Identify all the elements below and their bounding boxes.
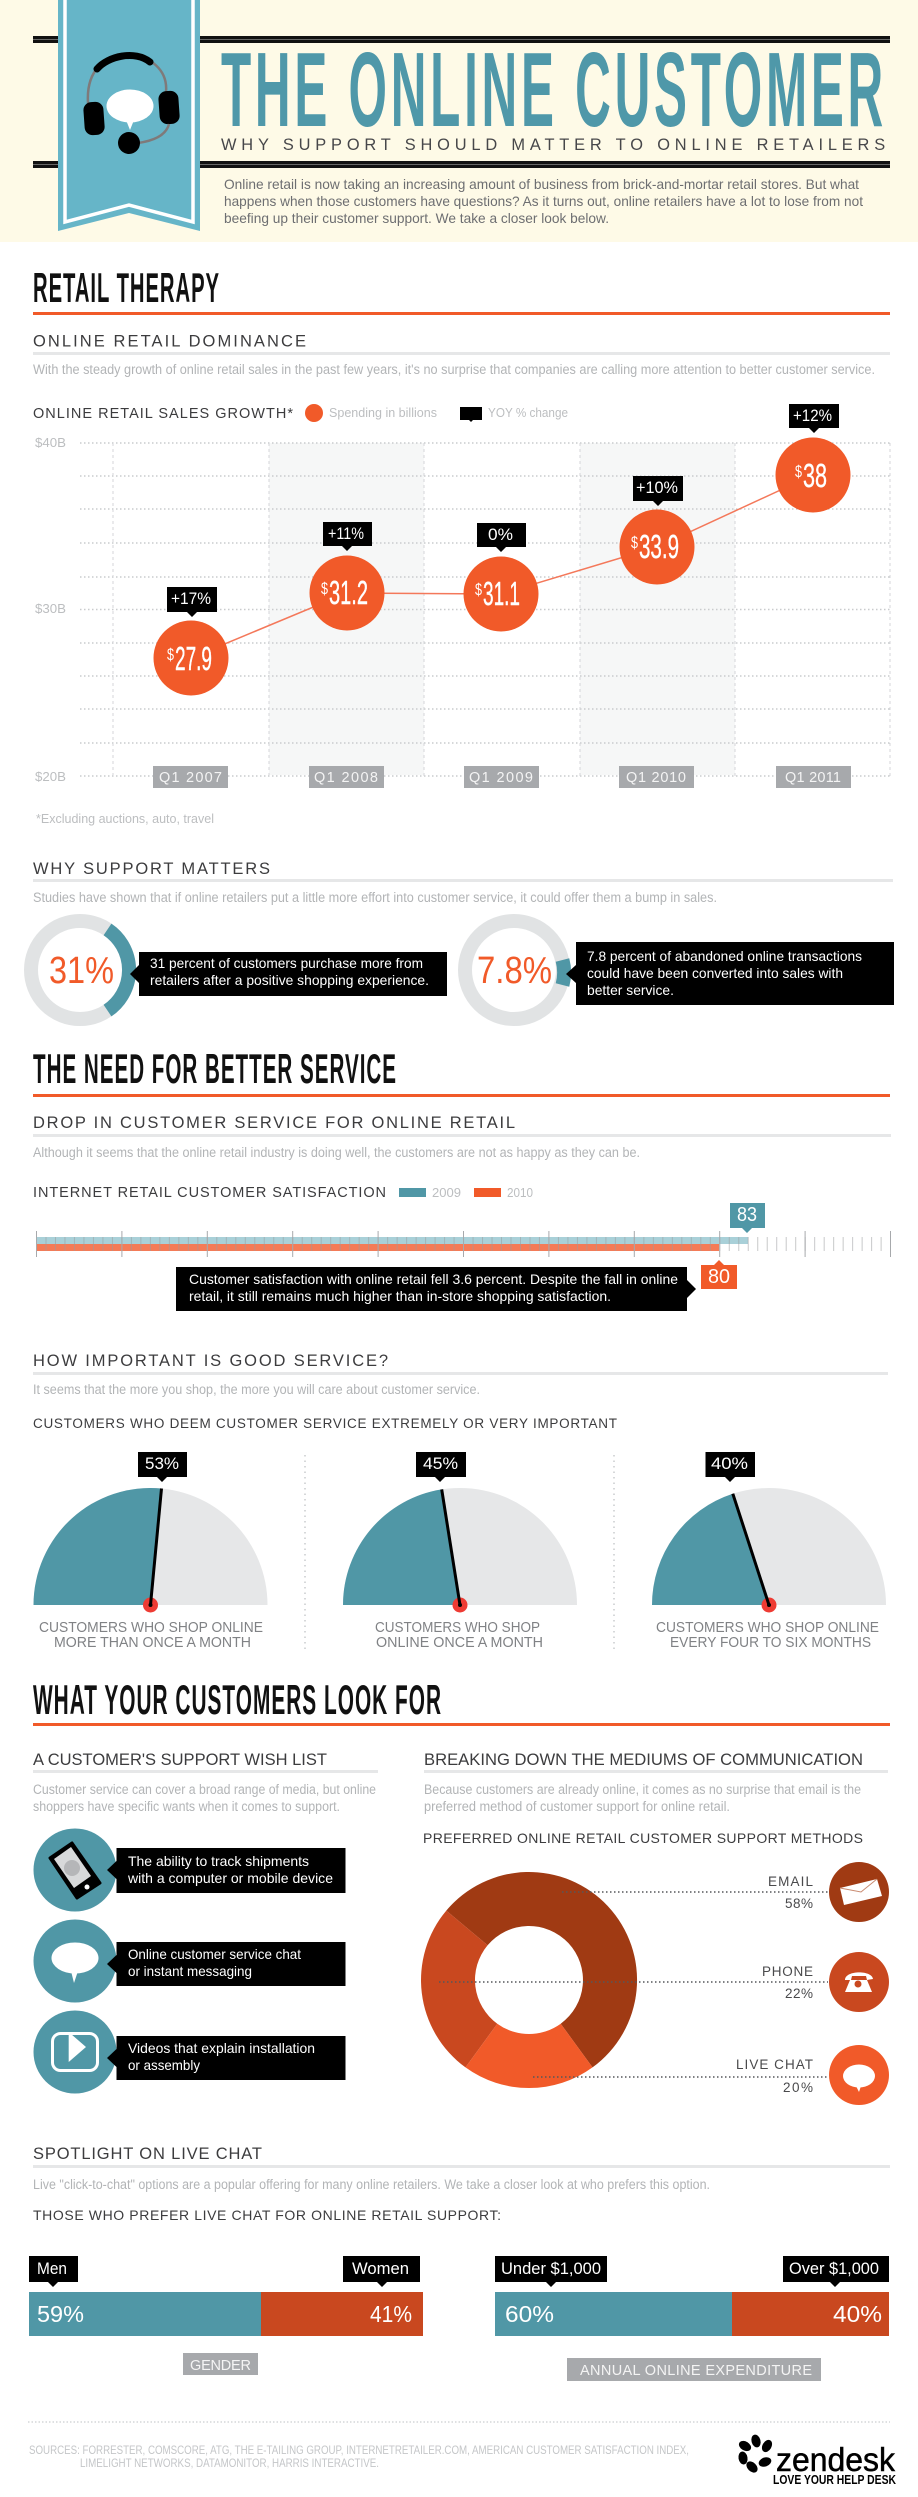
intro paragraph: happens when those customers have questions? As it turns out, online retailers have a lot to lose from not	[224, 193, 863, 209]
gauge: once a month: ONLINE ONCE A MONTH	[376, 1634, 543, 1651]
2009 value tag: 83	[737, 1204, 757, 1226]
icon: zendesk flower	[737, 2434, 774, 2475]
subheading: how important is good service	[33, 1352, 888, 1375]
legend: phone: 22%	[785, 1986, 813, 2001]
donut chart title: PREFERRED ONLINE RETAIL CUSTOMER SUPPORT METHODS	[423, 1830, 863, 1846]
ring stat: 7.8 percent: 7.8 percent of abandoned online transactions	[587, 948, 862, 964]
dominance paragraph: With the steady growth of online retail sales in the past few years, it's no surprise that companies are calling more attention to better customer service.	[33, 362, 875, 377]
satisfaction chart title: INTERNET RETAIL CUSTOMER SATISFACTION	[33, 1185, 386, 1201]
satisfaction callout: retail, it still remains much higher than in-store shopping satisfaction.	[189, 1288, 611, 1304]
wish item: tracking: The ability to track shipments	[128, 1853, 309, 1869]
ring stat: 31 percent	[31, 921, 447, 1019]
gauge: every four to six months: EVERY FOUR TO SIX MONTHS	[670, 1634, 871, 1651]
bar: gender: GENDER	[190, 2358, 251, 2374]
data point Q1 2011: 38	[803, 457, 827, 494]
subheading: mediums: BREAKING DOWN THE MEDIUMS OF COMMUNICATION	[424, 1751, 863, 1769]
mediums paragraph	[424, 1782, 861, 1814]
quarter labels: Q1 2009	[469, 770, 533, 786]
wish item: chat	[34, 1920, 346, 2002]
data point Q1 2009: 31.1	[483, 575, 520, 612]
quarter labels	[153, 766, 851, 788]
wish item: videos: Videos that explain installation	[128, 2040, 315, 2056]
subheading: how important is good service: HOW IMPORTANT IS GOOD SERVICE?	[33, 1352, 388, 1370]
ribbon with headset icon	[58, 0, 200, 231]
data point Q1 2007: +17%	[171, 589, 211, 608]
ring stat: 7.8 percent: better service.	[587, 982, 674, 998]
chart legend: Spending in billions	[329, 405, 437, 420]
legend: live chat	[736, 2045, 889, 2105]
subheading: wish list: A CUSTOMER'S SUPPORT WISH LIST	[33, 1751, 327, 1769]
wish item: tracking: with a computer or mobile device	[127, 1870, 333, 1886]
gauge: once a month	[343, 1452, 577, 1651]
wish item: chat: Online customer service chat	[128, 1946, 301, 1962]
bar: annual online expenditure: 40%	[833, 2301, 882, 2327]
legend: phone: PHONE	[762, 1964, 813, 1979]
sources: SOURCES: FORRESTER, COMSCORE, ATG, THE E-TAILING GROUP, INTERNETRETAILER.COM, AMERICAN CUSTOMER SATISFACTION INDEX,	[29, 2443, 689, 2457]
satisfaction bars	[36, 1203, 891, 1289]
gauge: every four to six months	[652, 1452, 886, 1651]
heading: the need for better service: THE NEED FOR BETTER SERVICE	[33, 1045, 397, 1092]
data point Q1 2011: +12%	[793, 406, 832, 425]
icon: chat bubble	[843, 2064, 875, 2092]
2010 value tag: 80	[708, 1266, 730, 1288]
spotlight paragraph: Live "click-to-chat" options are a popular offering for many online retailers. We take a closer look at who prefers this option.	[33, 2177, 710, 2192]
wish item: videos: or assembly	[128, 2057, 200, 2073]
gauge: every four to six months: 40%	[711, 1454, 748, 1473]
bar: annual online expenditure: ANNUAL ONLINE EXPENDITURE	[580, 2363, 812, 2379]
legend: email	[768, 1862, 889, 1922]
panel: mediums of communication	[421, 1751, 889, 2105]
data point Q1 2007: $	[167, 645, 174, 664]
chart footnote: *Excluding auctions, auto, travel	[36, 811, 214, 826]
ring stat: 7.8 percent: could have been converted into sales with	[587, 965, 843, 981]
legend: email: EMAIL	[768, 1874, 813, 1889]
subheading: online retail dominance	[33, 332, 890, 355]
icon: smartphone	[50, 1843, 100, 1898]
data point Q1 2011	[776, 404, 850, 512]
data point Q1 2009: 0%	[488, 525, 513, 544]
gauge: more than once a month: MORE THAN ONCE A MONTH	[54, 1634, 251, 1651]
gauge: more than once a month: 53%	[145, 1454, 179, 1473]
axis labels: $20B	[35, 769, 66, 784]
gauge: once a month: CUSTOMERS WHO SHOP	[375, 1619, 540, 1636]
gauge: once a month: 45%	[423, 1454, 458, 1473]
satisfaction callout: Customer satisfaction with online retail fell 3.6 percent. Despite the fall in online	[189, 1271, 678, 1287]
wish list paragraph	[33, 1782, 376, 1814]
axis labels	[35, 435, 66, 784]
subtitle: WHY SUPPORT SHOULD MATTER TO ONLINE RETAILERS	[221, 135, 890, 154]
wish item: videos	[34, 2010, 346, 2094]
ring stat: 7.8 percent	[465, 921, 894, 1019]
mediums paragraph: Because customers are already online, it comes as no surprise that email is the	[424, 1782, 861, 1797]
subheading: why support matters: WHY SUPPORT MATTERS	[33, 860, 270, 878]
sources	[29, 2443, 689, 2470]
data point Q1 2008: $	[321, 579, 328, 598]
gauge: more than once a month: CUSTOMERS WHO SHOP ONLINE	[39, 1619, 263, 1636]
gauge: more than once a month	[34, 1452, 268, 1651]
wish list paragraph: Customer service can cover a broad range of media, but online	[33, 1782, 376, 1797]
panel: support wish list	[33, 1751, 378, 2094]
data point Q1 2008	[310, 522, 384, 630]
ring stat: 7.8 percent: 7.8%	[477, 950, 552, 992]
ring stat: 31 percent: 31 percent of customers purchase more from	[150, 955, 423, 971]
bar: gender	[29, 2256, 423, 2375]
data point Q1 2011: $	[795, 462, 802, 481]
axis labels: $30B	[35, 601, 66, 616]
mediums paragraph: preferred method of customer support for online retail.	[424, 1799, 730, 1814]
gauge: every four to six months: CUSTOMERS WHO SHOP ONLINE	[656, 1619, 879, 1636]
chart title: ONLINE RETAIL SALES GROWTH*	[33, 406, 293, 422]
quarter labels: Q1 2010	[626, 770, 686, 786]
heading: retail therapy	[33, 264, 890, 315]
subheading: wish list	[33, 1751, 378, 1773]
axis labels: $40B	[35, 435, 66, 450]
heading: what your customers look for: WHAT YOUR CUSTOMERS LOOK FOR	[33, 1676, 442, 1723]
bar: gender: Men	[37, 2259, 67, 2278]
satisfaction legend	[399, 1185, 533, 1200]
sources: LIMELIGHT NETWORKS, DATAMONITOR, HARRIS INTERACTIVE.	[80, 2456, 379, 2470]
bar: annual online expenditure	[495, 2256, 889, 2381]
subheading: online retail dominance: ONLINE RETAIL DOMINANCE	[33, 332, 306, 350]
wish item: chat: or instant messaging	[128, 1963, 252, 1979]
heading: retail therapy: RETAIL THERAPY	[33, 264, 220, 311]
line chart: online retail sales growth	[35, 404, 890, 788]
2010 value tag	[701, 1260, 737, 1289]
subheading: drop in customer service	[33, 1114, 891, 1137]
icon: speech bubble	[52, 1942, 98, 1983]
satisfaction legend: 2010	[507, 1185, 533, 1200]
chart legend: YOY % change	[488, 405, 568, 420]
data point Q1 2009	[464, 523, 538, 632]
subheading: why support matters	[33, 860, 893, 882]
data line	[191, 475, 813, 658]
chart legend	[305, 404, 568, 422]
wish list paragraph: shoppers have specific wants when it comes to support.	[33, 1799, 340, 1814]
subheading: spotlight on live chat: SPOTLIGHT ON LIVE CHAT	[33, 2145, 262, 2163]
intro paragraph	[224, 176, 863, 226]
bar: annual online expenditure: Over $1,000	[789, 2259, 879, 2278]
header panel	[0, 0, 918, 242]
bar: gender: 59%	[37, 2301, 84, 2327]
quarter labels: Q1 2008	[314, 770, 378, 786]
drop paragraph: Although it seems that the online retail industry is doing well, the customers are not as happy as they can be.	[33, 1145, 640, 1160]
icon: telephone	[845, 1972, 873, 1992]
legend: phone	[762, 1952, 889, 2012]
gauge chart title: CUSTOMERS WHO DEEM CUSTOMER SERVICE EXTREMELY OR VERY IMPORTANT	[33, 1416, 617, 1431]
data point Q1 2010: +10%	[636, 478, 678, 497]
data point Q1 2007	[154, 587, 228, 696]
ring stat: 31 percent: retailers after a positive shopping experience.	[150, 972, 429, 988]
subheading: drop in customer service: DROP IN CUSTOMER SERVICE FOR ONLINE RETAIL	[33, 1114, 515, 1132]
bar: gender: Women	[352, 2259, 409, 2278]
data point Q1 2007: 27.9	[175, 640, 212, 677]
legend: live chat: LIVE CHAT	[736, 2057, 813, 2072]
data point Q1 2009: $	[475, 580, 482, 599]
intro paragraph: beefing up their customer support. We take a closer look below.	[224, 210, 609, 226]
data point Q1 2008: 31.2	[329, 574, 368, 611]
donut chart	[421, 1872, 637, 2088]
data point Q1 2010: 33.9	[639, 528, 679, 565]
wish item: tracking	[34, 1828, 346, 1912]
good service paragraph: It seems that the more you shop, the more you will care about customer service.	[33, 1382, 480, 1397]
quarter labels: Q1 2011	[785, 770, 841, 786]
quarter labels: Q1 2007	[159, 770, 222, 786]
why support paragraph: Studies have shown that if online retailers put a little more effort into customer service, it could offer them a bump in sales.	[33, 890, 717, 905]
ring stat: 31 percent: 31%	[49, 950, 114, 992]
zendesk logo: zendesk	[776, 2441, 895, 2478]
satisfaction legend: 2009	[432, 1185, 461, 1200]
satisfaction callout	[176, 1267, 696, 1311]
data point Q1 2010	[620, 476, 694, 584]
icon: envelope	[840, 1879, 882, 1905]
bar: annual online expenditure: Under $1,000	[501, 2259, 601, 2278]
icon: video player	[52, 2032, 98, 2070]
spotlight chart title: THOSE WHO PREFER LIVE CHAT FOR ONLINE RETAIL SUPPORT:	[33, 2207, 501, 2223]
zendesk logo	[737, 2434, 896, 2487]
subheading: spotlight on live chat	[33, 2145, 890, 2168]
2009 value tag	[730, 1203, 765, 1233]
data point Q1 2008: +11%	[328, 524, 364, 543]
legend: live chat: 20%	[783, 2080, 813, 2095]
legend: email: 58%	[785, 1896, 813, 1911]
intro paragraph: Online retail is now taking an increasing amount of business from brick-and-mortar retail stores. But what	[224, 176, 859, 192]
bar: gender: 41%	[370, 2301, 412, 2327]
data point Q1 2010: $	[631, 533, 638, 552]
bar: annual online expenditure: 60%	[505, 2301, 554, 2327]
